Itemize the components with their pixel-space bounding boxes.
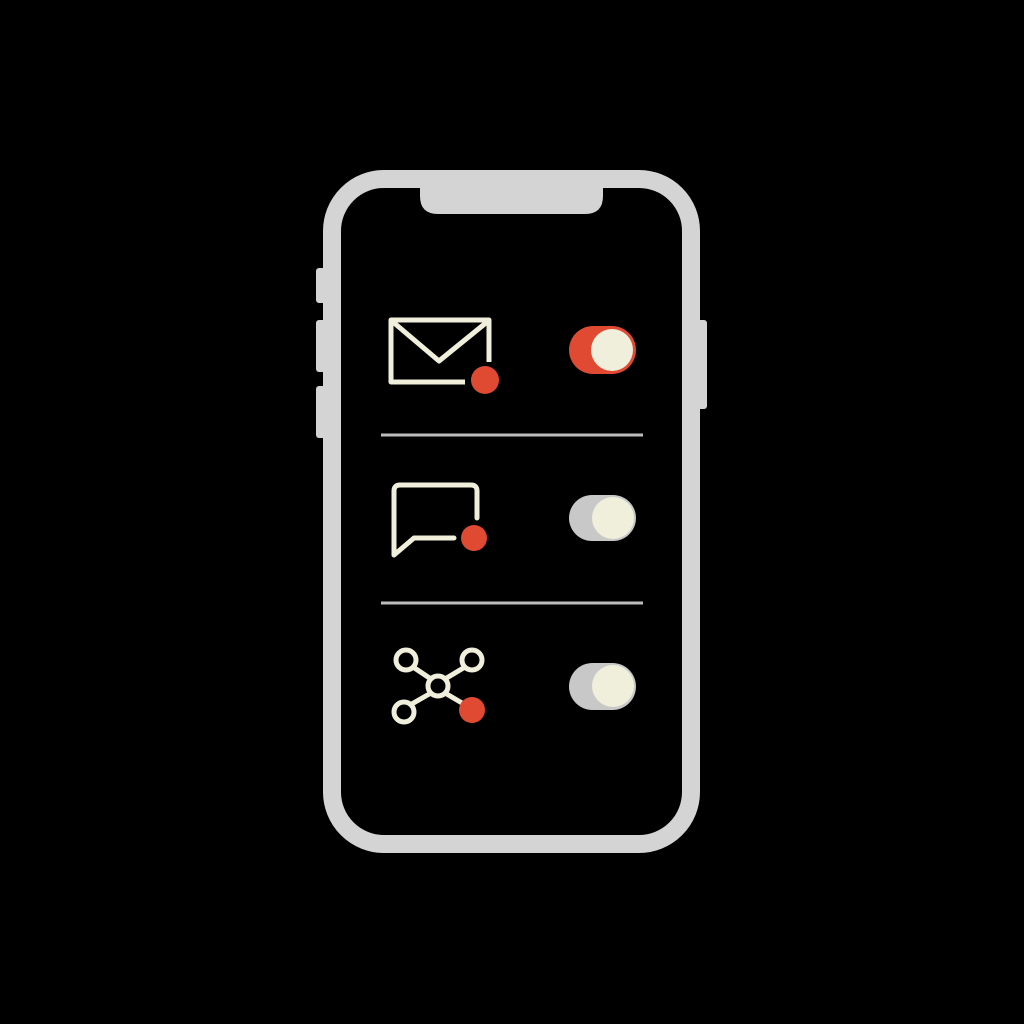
toggle on <box>569 326 636 374</box>
row: chat notification <box>394 485 636 555</box>
badge dot <box>459 697 485 723</box>
badge dot <box>461 525 487 551</box>
row: mail notification <box>391 320 636 394</box>
toggle off <box>569 663 636 710</box>
icon: network nodes <box>394 650 482 722</box>
toggle off <box>569 495 636 541</box>
phone frame <box>316 179 707 844</box>
badge dot <box>471 366 499 394</box>
icon: envelope <box>391 320 489 382</box>
side buttons <box>316 268 707 438</box>
row: network notification <box>394 650 636 723</box>
icon: chat bubble <box>394 485 477 555</box>
notch <box>420 186 603 214</box>
